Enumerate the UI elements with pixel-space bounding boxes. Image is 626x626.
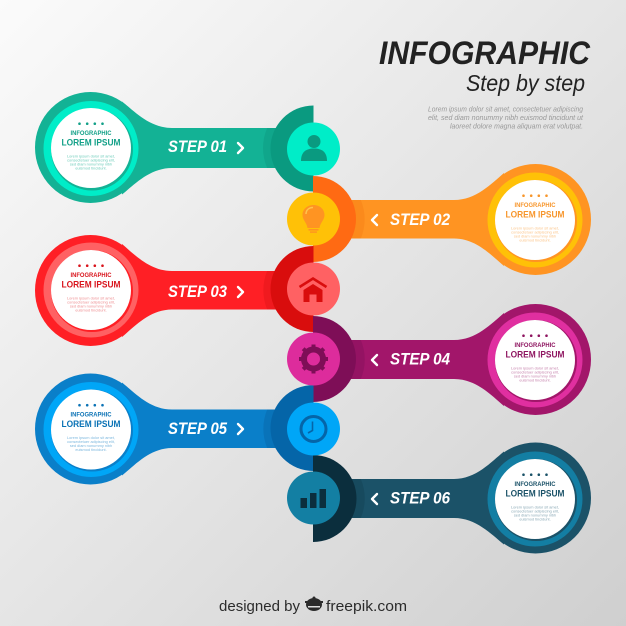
circle text: euismod tincidunt. bbox=[75, 447, 107, 452]
circle text bbox=[62, 264, 120, 312]
description bbox=[428, 106, 584, 130]
circle text: Lorem ipsum dolor sit amet, bbox=[67, 435, 115, 440]
circle text: euismod tincidunt. bbox=[519, 377, 551, 382]
panel: step 03 bbox=[35, 235, 300, 346]
step label: STEP 05 bbox=[168, 420, 228, 438]
panel: step 06 bbox=[330, 442, 591, 554]
circle text: sed diam nonummy nibh bbox=[514, 512, 556, 518]
circle text bbox=[62, 404, 120, 452]
circle text: consectetuer adipiscing elit, bbox=[67, 158, 115, 163]
circle text: consectetuer adipiscing elit, bbox=[67, 439, 115, 444]
circle text bbox=[62, 122, 120, 170]
step label: STEP 06 bbox=[390, 490, 451, 508]
circle text bbox=[506, 334, 564, 382]
icon: person bbox=[287, 122, 340, 176]
circle text: INFOGRAPHIC bbox=[514, 343, 556, 349]
circle text: LOREM IPSUM bbox=[506, 210, 564, 221]
panel: step 02 bbox=[330, 164, 591, 275]
panel: step 05 bbox=[35, 374, 300, 484]
footer credit: designed by bbox=[219, 598, 300, 615]
circle text: consectetuer adipiscing elit, bbox=[67, 300, 115, 305]
circle text: INFOGRAPHIC bbox=[514, 203, 556, 209]
circle text: Lorem ipsum dolor sit amet, bbox=[511, 366, 559, 371]
step label: STEP 01 bbox=[168, 138, 227, 156]
circle text: euismod tincidunt. bbox=[519, 237, 551, 242]
circle text: Lorem ipsum dolor sit amet, bbox=[511, 226, 559, 231]
icon: house bbox=[287, 262, 340, 316]
description: Lorem ipsum dolor sit amet, consectetuer adipiscing bbox=[428, 106, 583, 114]
icon: gear bbox=[287, 332, 340, 386]
circle text: consectetuer adipiscing elit, bbox=[511, 509, 559, 514]
circle text: sed diam nonummy nibh bbox=[70, 443, 112, 448]
circle text: INFOGRAPHIC bbox=[514, 482, 556, 488]
circle text: LOREM IPSUM bbox=[62, 280, 120, 291]
half discs at the central spine bbox=[270, 106, 356, 542]
circle text: euismod tincidunt. bbox=[75, 165, 107, 170]
arrow bbox=[238, 424, 243, 434]
title: INFOGRAPHIC bbox=[379, 35, 591, 71]
step label: STEP 03 bbox=[168, 283, 227, 301]
description: elit, sed diam nonummy nibh euismod tincidunt ut bbox=[428, 115, 584, 122]
panel: step 04 bbox=[330, 304, 591, 415]
circle text: INFOGRAPHIC bbox=[70, 273, 112, 279]
icon: bar chart bbox=[287, 472, 340, 524]
panel: step 01 bbox=[35, 92, 300, 203]
circle text: Lorem ipsum dolor sit amet, bbox=[67, 296, 115, 301]
circle text: sed diam nonummy nibh bbox=[514, 234, 556, 238]
footer credit: freepik.com bbox=[326, 598, 407, 615]
circle text: euismod tincidunt. bbox=[519, 516, 551, 521]
circle text bbox=[506, 194, 564, 242]
circle text bbox=[506, 473, 564, 521]
circle text: INFOGRAPHIC bbox=[70, 412, 112, 418]
arrow bbox=[238, 287, 243, 297]
footer credit bbox=[219, 596, 407, 615]
circle text: LOREM IPSUM bbox=[62, 138, 120, 149]
title block bbox=[379, 35, 591, 130]
circle text: consectetuer adipiscing elit, bbox=[511, 230, 559, 235]
step label: STEP 02 bbox=[390, 211, 450, 229]
circle text: LOREM IPSUM bbox=[506, 489, 564, 500]
arrow bbox=[372, 355, 377, 365]
circle text: INFOGRAPHIC bbox=[70, 131, 112, 137]
arrow bbox=[372, 215, 377, 225]
icon: freepik logo bbox=[305, 596, 323, 611]
circle text: LOREM IPSUM bbox=[62, 419, 120, 430]
circle text: LOREM IPSUM bbox=[506, 350, 564, 361]
step label: STEP 04 bbox=[390, 350, 450, 368]
circle text: consectetuer adipiscing elit, bbox=[511, 370, 559, 375]
arrow bbox=[238, 143, 243, 153]
arrow bbox=[372, 494, 377, 504]
circle text: sed diam nonummy nibh bbox=[514, 374, 556, 378]
circle text: sed diam nonummy nibh bbox=[70, 162, 112, 166]
circle text: sed diam nonummy nibh bbox=[70, 304, 112, 308]
subtitle: Step by step bbox=[466, 70, 585, 96]
circle text: Lorem ipsum dolor sit amet, bbox=[67, 154, 115, 159]
icon: clock bbox=[287, 402, 340, 456]
circle text: Lorem ipsum dolor sit amet, bbox=[511, 505, 559, 510]
description: laoreet dolore magna aliquam erat volutpat. bbox=[450, 124, 583, 130]
circle text: euismod tincidunt. bbox=[75, 307, 107, 312]
icon: light bulb bbox=[287, 192, 340, 246]
